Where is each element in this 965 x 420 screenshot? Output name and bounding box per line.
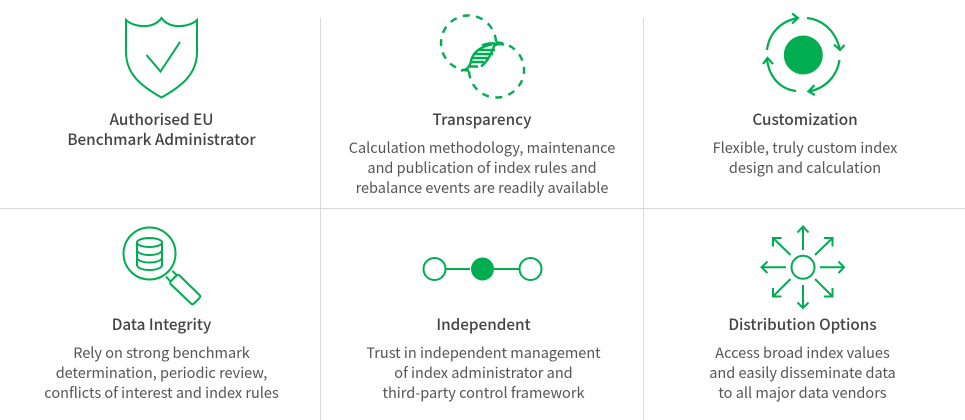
text: Customization description xyxy=(713,137,898,178)
text: Independent description: of index administrator and xyxy=(394,362,573,383)
panel: Independent xyxy=(366,313,601,403)
text: Independent description: Trust in independent management xyxy=(366,342,601,363)
text: Data Integrity description: Rely on strong benchmark xyxy=(73,342,250,363)
heading: Authorised EU Benchmark Administrator: Authorised EU xyxy=(109,108,214,130)
text: Data Integrity description xyxy=(44,342,279,403)
icon: overlapping dashed circles with DNA xyxy=(441,16,524,97)
text: Distribution Options description: and easily disseminate data xyxy=(709,362,896,383)
panel: Data Integrity xyxy=(44,313,279,403)
text: Distribution Options description xyxy=(709,342,896,403)
panel: Customization xyxy=(713,108,898,178)
panel: Distribution Options xyxy=(709,313,896,403)
text: Transparency description xyxy=(349,137,615,198)
text: Distribution Options description: to all major data vendors xyxy=(718,382,887,403)
text: Transparency description: Calculation methodology, maintenance xyxy=(349,137,615,158)
heading: Independent: Independent xyxy=(436,313,531,335)
heading: Distribution Options: Distribution Options xyxy=(728,313,877,335)
text: Customization description: Flexible, truly custom index xyxy=(713,137,897,158)
icon: magnifier with database xyxy=(124,228,200,304)
icon: circular arrows around a dot xyxy=(763,14,844,95)
text: Independent description: third-party control framework xyxy=(383,382,584,403)
heading: Authorised EU Benchmark Administrator xyxy=(67,108,256,150)
text: Data Integrity description: determination, periodic review, xyxy=(56,362,267,383)
heading: Data Integrity: Data Integrity xyxy=(112,313,211,335)
heading: Transparency: Transparency xyxy=(433,108,531,130)
heading: Customization: Customization xyxy=(752,108,858,130)
icon: arrows radiating from a circle xyxy=(762,226,844,308)
panel: Authorised EU Benchmark Administrator xyxy=(67,108,256,150)
heading: Authorised EU Benchmark Administrator: Benchmark Administrator xyxy=(67,128,256,150)
text: Distribution Options description: Access broad index values xyxy=(715,342,890,363)
text: Data Integrity description: conflicts of interest and index rules xyxy=(44,382,279,403)
text: Customization description: design and calculation xyxy=(729,157,881,178)
icon: three connected nodes xyxy=(424,258,542,280)
icon: shield with check xyxy=(126,18,197,98)
panel: Transparency xyxy=(349,108,615,198)
text: Transparency description: and publication of index rules and xyxy=(367,157,597,178)
text: Transparency description: rebalance events are readily available xyxy=(356,177,608,198)
text: Independent description xyxy=(366,342,601,403)
